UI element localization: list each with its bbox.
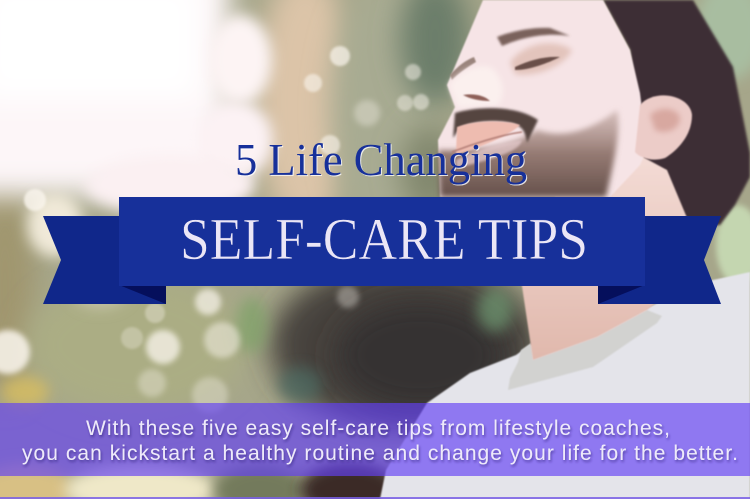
face	[438, 0, 647, 197]
lower foliage strip	[0, 464, 75, 499]
hair back	[603, 0, 750, 225]
eyebrow	[497, 28, 570, 46]
intro text: With these five easy self-care tips from lifestyle coaches,	[86, 417, 670, 440]
intro band	[0, 403, 750, 476]
nostril	[463, 94, 490, 101]
nose	[449, 66, 502, 108]
bottom edge line	[0, 497, 750, 499]
intro text: you can kickstart a healthy routine and change your life for the better.	[22, 442, 738, 465]
moustache	[453, 108, 538, 143]
lips	[456, 121, 520, 154]
bokeh	[0, 46, 429, 413]
ribbon left fold	[119, 285, 166, 304]
title: SELF-CARE TIPS	[180, 206, 588, 272]
far eyebrow	[450, 57, 476, 80]
subtitle: 5 Life Changing	[236, 135, 528, 186]
sun flare	[0, 0, 230, 195]
eye	[515, 57, 560, 70]
band background	[0, 403, 750, 476]
subtitle: 5 Life Changing	[235, 134, 527, 185]
top right foliage	[695, 0, 750, 80]
neck	[515, 150, 690, 360]
ribbon left tail	[43, 216, 166, 304]
chin	[456, 140, 522, 168]
ribbon centre panel	[119, 197, 645, 286]
collar	[508, 310, 662, 390]
eye socket	[510, 43, 572, 75]
shirt	[380, 272, 750, 499]
ribbon right fold	[598, 285, 645, 304]
ribbon banner	[43, 197, 721, 304]
intro text	[22, 417, 738, 465]
ribbon right tail	[598, 216, 721, 304]
beard	[438, 110, 618, 197]
ear	[635, 95, 692, 160]
